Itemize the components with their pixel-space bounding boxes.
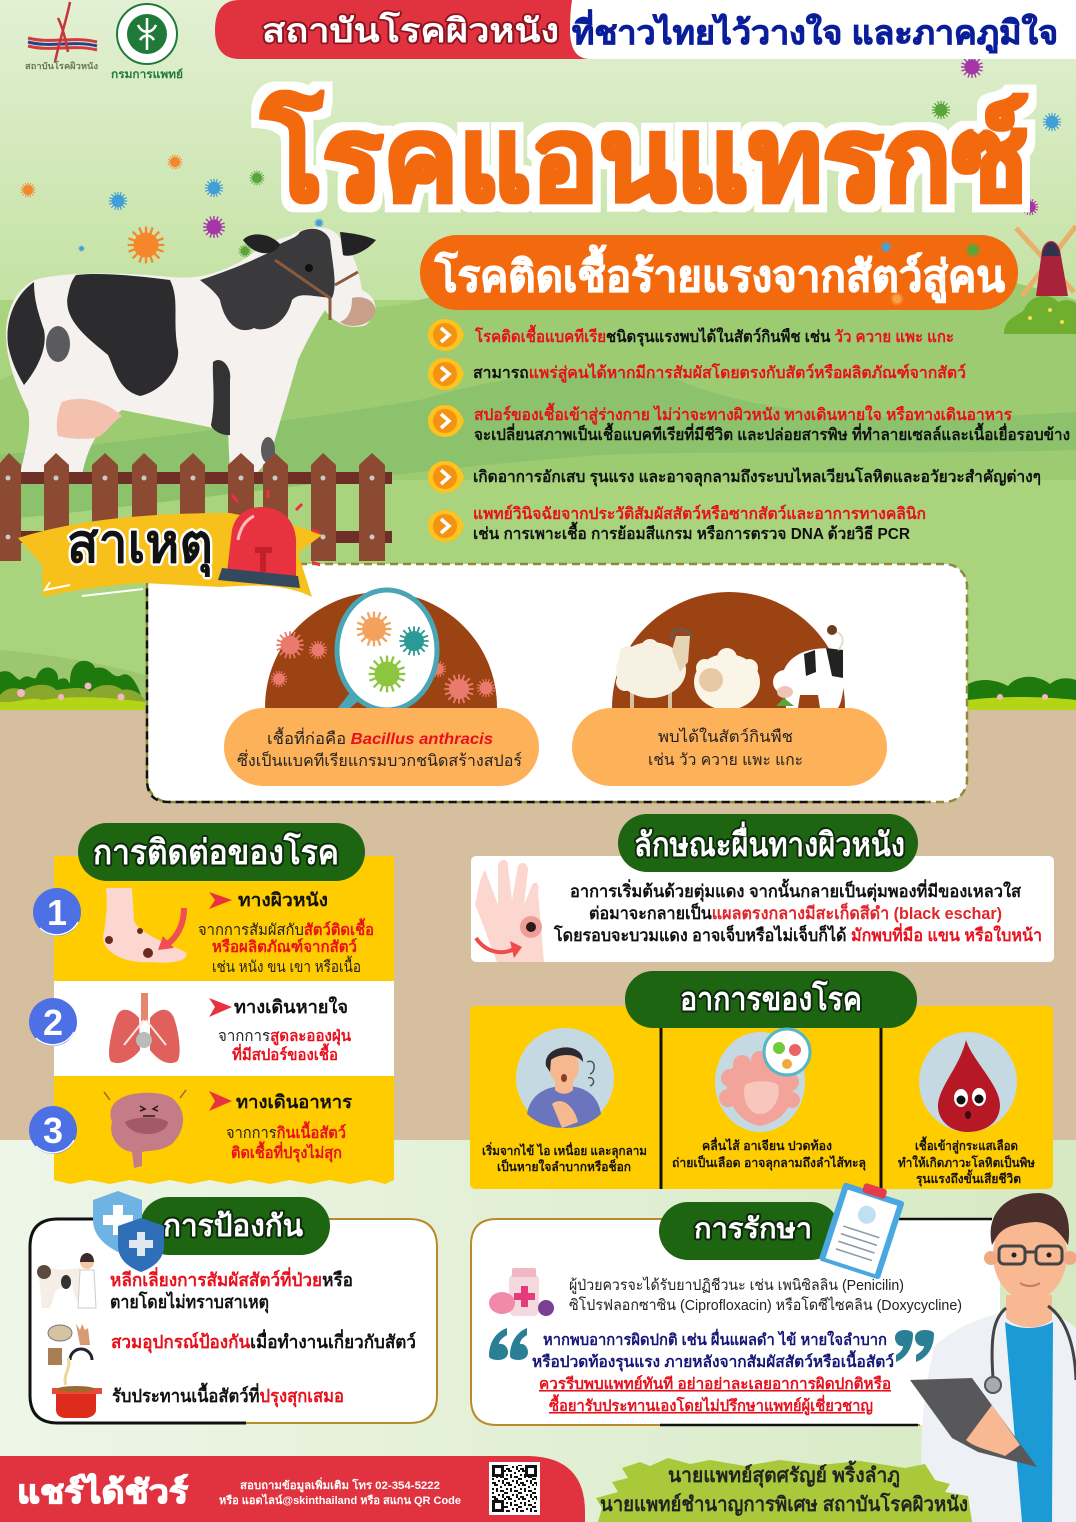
body text: อาการเริ่มต้นด้วยตุ่มแดง จากนั้นกลายเป็นตุ่มพองที่มีของเหลวใส xyxy=(570,878,1022,902)
panel: symptoms xyxy=(470,971,1053,1189)
footer band: สอบถามข้อมูลเพิ่มเติม โทร 02-354-5222 xyxy=(240,1477,440,1493)
panel: transmission xyxy=(29,823,394,1184)
number 2 xyxy=(29,998,77,1046)
footer band xyxy=(0,1456,585,1522)
number 1 xyxy=(33,888,81,936)
transmission 1 text: จากการสัมผัสกับสัตว์ติดเชื้อ xyxy=(198,918,374,939)
symptom 3: รุนแรงถึงขั้นเสียชีวิต xyxy=(916,1169,1021,1187)
transmission 2 text xyxy=(209,996,351,1064)
body text xyxy=(553,878,1042,945)
quotes and warning: ซื้อยารับประทานเองโดยไม่ปรึกษาแพทย์ผู้เชี่ยวชาญ xyxy=(549,1394,873,1417)
header banner: ที่ชาวไทยไว้วางใจ และภาคภูมิใจ xyxy=(572,9,1058,54)
doctor xyxy=(910,1193,1076,1522)
heading xyxy=(625,971,917,1028)
icon: alarm xyxy=(218,490,320,588)
subtitle pill: โรคติดเชื้อร้ายแรงจากสัตว์สู่คน xyxy=(434,244,1006,303)
bullet list: เช่น การเพาะเชื้อ การย้อมสีแกรม หรือการตรวจ DNA ด้วยวิธี PCR xyxy=(473,521,910,543)
medication text: ซิโปรฟลอกซาซิน (Ciprofloxacin) หรือโดซีไซคลิน (Doxycycline) xyxy=(569,1296,962,1314)
panel: treatment xyxy=(471,1176,1000,1425)
logo: institute of dermatology: สถาบันโรคผิวหนัง xyxy=(25,60,98,71)
fence xyxy=(0,453,392,561)
symptom 2: คลื่นไส้ อาเจียน ปวดท้อง xyxy=(702,1137,832,1153)
bushes right xyxy=(968,677,1076,710)
icon: hand xyxy=(475,860,544,962)
icon: pills xyxy=(489,1268,554,1316)
symptom 2: ถ่ายเป็นเลือด อาจลุกลามถึงลำไส้ทะลุ xyxy=(672,1155,866,1171)
cause 1 illustration xyxy=(265,590,497,710)
heading xyxy=(618,814,918,872)
bullet list: สามารถแพร่สู่คนได้หากมีการสัมผัสโดยตรงกับสัตว์หรือผลิตภัณฑ์จากสัตว์ xyxy=(473,362,966,384)
background: green hills xyxy=(0,257,1076,720)
viruses floating xyxy=(21,56,1061,263)
doctor name box: นายแพทย์ชำนาญการพิเศษ สถาบันโรคผิวหนัง xyxy=(600,1492,968,1516)
cause 1 text xyxy=(224,708,539,786)
doctor name box xyxy=(596,1458,972,1522)
cause 2 text: พบได้ในสัตว์กินพืช xyxy=(658,727,793,746)
footer band: หรือ แอดไลน์@skinthailand หรือ สแกน QR Code xyxy=(219,1493,461,1507)
background: sky xyxy=(0,0,1076,340)
item 2 xyxy=(48,1324,416,1365)
transmission 3 text: จากการกินเนื้อสัตว์ xyxy=(226,1121,346,1142)
item 3 xyxy=(52,1358,344,1418)
header banner: สถาบันโรคผิวหนัง xyxy=(262,11,559,49)
item 1: หลีกเลี่ยงการสัมผัสสัตว์ที่ป่วยหรือ xyxy=(110,1267,353,1290)
bullet list: เกิดอาการอักเสบ รุนแรง และอาจลุกลามถึงระบบไหลเวียนโลหิตและอวัยวะสำคัญต่างๆ xyxy=(473,466,1041,487)
item 2: สวมอุปกรณ์ป้องกันเมื่อทำงานเกี่ยวกับสัตว์ xyxy=(111,1329,416,1354)
panel: causes xyxy=(147,564,967,802)
quotes and warning: หากพบอาการผิดปกติ เช่น ผื่นแผลดำ ไข้ หายใจลำบาก xyxy=(543,1328,887,1349)
number 1: 1 xyxy=(47,892,67,933)
item 3: รับประทานเนื้อสัตว์ที่ปรุงสุกเสมอ xyxy=(112,1382,344,1408)
bullet list: โรคติดเชื้อแบคทีเรียชนิดรุนแรงพบได้ในสัตว์กินพืช เช่น วัว ควาย แพะ แกะ xyxy=(474,324,954,347)
subtitle pill xyxy=(420,235,1018,310)
transmission 1 text xyxy=(198,890,374,976)
panel: prevention xyxy=(30,1191,437,1423)
heading: การติดต่อของโรค xyxy=(93,832,339,872)
cause 2 text: เช่น วัว ควาย แพะ แกะ xyxy=(648,752,803,769)
cause 1 text: ซึ่งเป็นแบคทีเรียแกรมบวกชนิดสร้างสปอร์ xyxy=(237,749,522,770)
transmission 1 text: หรือผลิตภัณฑ์จากสัตว์ xyxy=(212,938,357,956)
panel: skin rash xyxy=(471,814,1054,962)
number 2: 2 xyxy=(43,1002,63,1043)
symptom 1 xyxy=(482,1028,647,1174)
symptom 2 xyxy=(672,1029,866,1171)
heading: ลักษณะผื่นทางผิวหนัง xyxy=(634,821,905,863)
transmission 1 text: ทางผิวหนัง xyxy=(238,890,328,910)
logo: ministry of public health xyxy=(111,4,183,81)
heading: การป้องกัน xyxy=(163,1210,303,1243)
bullet list xyxy=(428,319,1070,543)
quotes and warning: ควรรีบพบแพทย์ทันที อย่าอย่าละเลยอาการผิดปกติหรือ xyxy=(539,1375,891,1393)
doctor name box: นายแพทย์สุตศรัญย์ พริ้งลำภู xyxy=(668,1460,900,1489)
medication text: ผู้ป่วยควรจะได้รับยาปฏิชีวนะ เช่น เพนิซิลลิน (Penicilin) xyxy=(569,1276,904,1294)
heading xyxy=(78,823,365,881)
causes banner: สาเหตุ xyxy=(67,514,213,578)
symptom 3: เชื้อเข้าสู่กระแสเลือด xyxy=(915,1136,1018,1154)
bushes left xyxy=(0,661,145,710)
body text: โดยรอบจะบวมแดง อาจเจ็บหรือไม่เจ็บก็ได้ มักพบที่มือ แขน หรือใบหน้า xyxy=(553,923,1042,945)
cause 2 illustration xyxy=(612,592,845,710)
item 1: ตายโดยไม่ทราบสาเหตุ xyxy=(110,1291,269,1314)
cause 2 text xyxy=(572,708,887,786)
bush near windmill xyxy=(1004,296,1076,334)
body text: ต่อมาจะกลายเป็นแผลตรงกลางมีสะเก็ดสีดำ (black eschar) xyxy=(589,901,1002,923)
icon: foot xyxy=(103,888,187,963)
header banner xyxy=(215,0,1076,59)
transmission 3 text: ติดเชื้อที่ปรุงไม่สุก xyxy=(231,1141,342,1163)
number 3 xyxy=(29,1106,77,1154)
logo: ministry of public health: กรมการแพทย์ xyxy=(111,68,183,81)
background: brown ground xyxy=(0,708,1076,1140)
transmission 2 text: ที่มีสปอร์ของเชื้อ xyxy=(232,1043,338,1064)
heading: อาการของโรค xyxy=(680,980,862,1017)
transmission 1 text: เช่น หนัง ขน เขา หรือเนื้อ xyxy=(212,955,361,976)
symptom 1: เริ่มจากไข้ ไอ เหนื่อย และลุกลาม xyxy=(482,1142,647,1159)
QR code xyxy=(489,1462,540,1515)
item 1 xyxy=(37,1253,353,1314)
cow xyxy=(6,227,376,475)
icon: shields xyxy=(93,1191,164,1272)
heading xyxy=(659,1202,840,1260)
bullet list: สปอร์ของเชื้อเข้าสู่ร่างกาย ไม่ว่าจะทางผิวหนัง ทางเดินหายใจ หรือทางเดินอาหาร xyxy=(474,402,1012,426)
causes banner xyxy=(18,490,322,597)
symptom 3: ทำให้เกิดภาวะโลหิตเป็นพิษ xyxy=(898,1155,1035,1170)
quotes and warning: หรือปวดท้องรุนแรง ภายหลังจากสัมผัสสัตว์หรือเนื้อสัตว์ xyxy=(532,1350,894,1372)
quotes and warning xyxy=(489,1328,934,1417)
logo: institute of dermatology xyxy=(25,2,98,71)
icon: clipboard xyxy=(819,1176,907,1280)
transmission 2 text: จากการสูดละอองฝุ่น xyxy=(218,1028,351,1047)
bullet icons xyxy=(428,319,464,542)
heading xyxy=(140,1197,330,1255)
bullet list: แพทย์วินิจฉัยจากประวัติสัมผัสสัตว์หรือซากสัตว์และอาการทางคลินิก xyxy=(473,504,926,523)
transmission 3 text: ทางเดินอาหาร xyxy=(236,1092,352,1112)
background: lower pale area xyxy=(0,1140,1076,1522)
icon: lungs xyxy=(109,993,180,1063)
transmission 3 text xyxy=(209,1091,352,1163)
title: โรคแอนแทรกซ์ xyxy=(261,91,1028,226)
medication text xyxy=(569,1276,962,1314)
windmill xyxy=(1016,226,1076,296)
icon: intestines xyxy=(104,1090,186,1168)
symptom 3 xyxy=(898,1032,1035,1187)
heading: การรักษา xyxy=(694,1213,812,1244)
footer band: แชร์ได้ชัวร์ xyxy=(17,1473,188,1510)
number 3: 3 xyxy=(43,1110,63,1151)
transmission 2 text: ทางเดินหายใจ xyxy=(234,996,348,1017)
cause 1 text: เชื้อที่ก่อคือ Bacillus anthracis xyxy=(267,727,493,748)
symptom 1: เป็นหายใจลำบากหรือช็อก xyxy=(497,1159,631,1174)
